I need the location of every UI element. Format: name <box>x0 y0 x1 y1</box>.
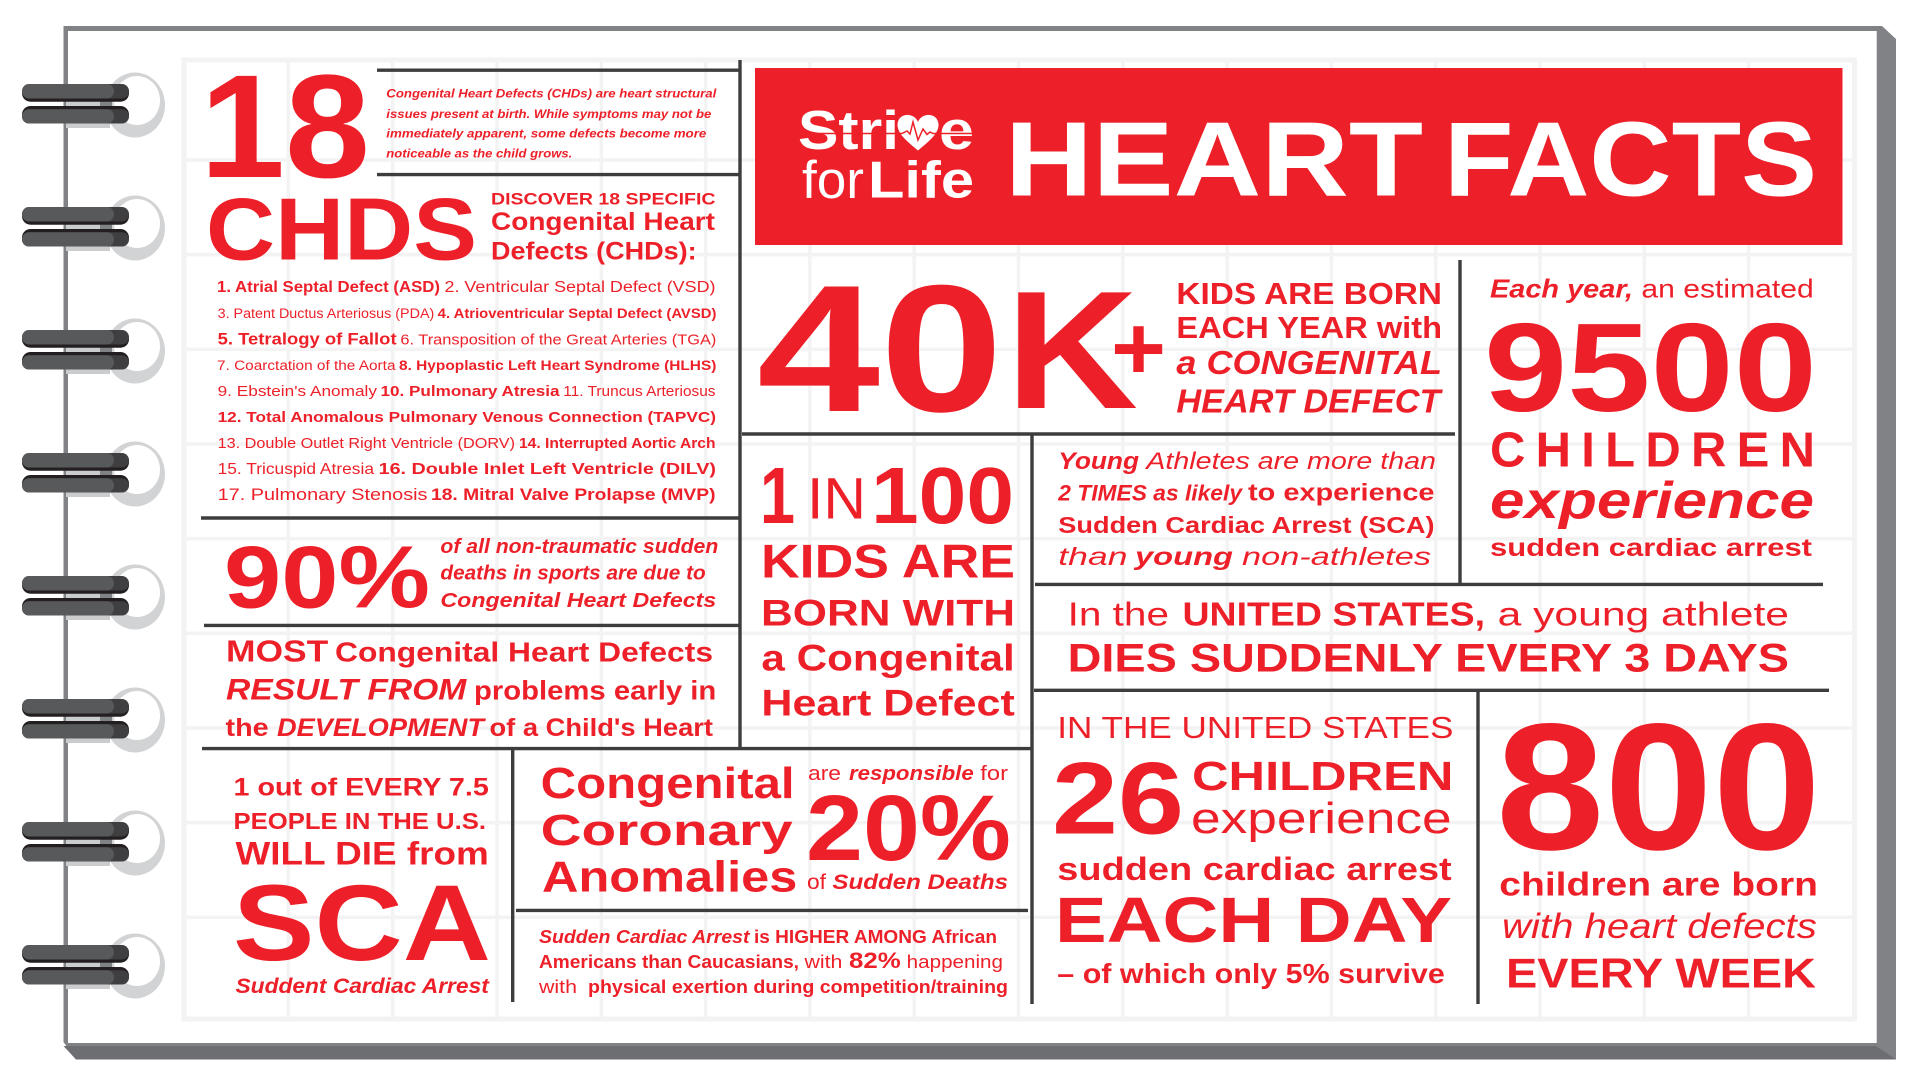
stat: 40K+ kids born each year <box>757 248 1443 450</box>
stat: 1 in 100 kids: IN <box>807 467 866 532</box>
most congenital heart defects fact: the <box>226 714 269 742</box>
stat: 1 in 100 kids: Heart Defect <box>761 683 1015 724</box>
young athletes fact <box>1057 448 1436 571</box>
intro paragraph: immediately apparent, some defects become more <box>386 127 707 141</box>
stat: coronary anomalies 20%: are <box>808 763 841 785</box>
intro paragraph: noticeable as the child grows. <box>386 147 572 161</box>
number 40K+: + <box>1111 299 1166 399</box>
number 800: 800 <box>1496 687 1821 888</box>
list of 18 congenital heart defects: 3. Patent Ductus Arteriosus (PDA) <box>218 306 434 321</box>
SCA among African Americans fact: is HIGHER AMONG African <box>754 926 997 947</box>
stat: coronary anomalies 20% <box>541 759 1011 901</box>
caption: KIDS ARE BORN <box>1176 276 1442 311</box>
caption: HEART DEFECT <box>1176 382 1443 420</box>
logo: Strive for Life: e <box>939 99 974 161</box>
number 18: 18 <box>200 45 370 209</box>
stat: coronary anomalies 20%: Sudden Deaths <box>832 871 1008 894</box>
SCA among African Americans fact: physical exertion during competition/training <box>588 976 1008 997</box>
word CHDS: CHDS <box>206 180 477 279</box>
most congenital heart defects fact: Congenital Heart Defects <box>335 636 713 667</box>
title: HEART FACTS: HEART <box>1005 100 1423 218</box>
stat: 800 children every week <box>1496 687 1821 996</box>
heading: discover 18 specific CHDs: DISCOVER 18 SPECIFIC <box>491 190 716 208</box>
title: HEART FACTS <box>1005 100 1817 218</box>
most congenital heart defects fact <box>226 633 716 742</box>
stat: SCA 1 out of 7.5 people <box>233 774 491 998</box>
stat: 800 children every week: with heart defects <box>1502 907 1817 946</box>
stat: 1 in 100 kids: KIDS ARE <box>761 534 1015 588</box>
logo: Strive for Life: Life <box>868 151 974 209</box>
most congenital heart defects fact: problems early in <box>474 676 716 706</box>
stat: SCA 1 out of 7.5 people: Suddent Cardiac Arrest <box>236 975 490 998</box>
stat: 26 children each day: CHILDREN <box>1192 753 1453 799</box>
stat: 90% of sudden deaths in sports: Congenital Heart Defects <box>440 590 716 612</box>
fact: athlete dies every 3 days <box>1068 595 1789 680</box>
divider rules <box>201 60 1829 1004</box>
SCA among African Americans fact: Americans than Caucasians, <box>539 951 799 972</box>
stat: 26 children each day: – of which only 5% survive <box>1057 958 1445 989</box>
list of 18 congenital heart defects: 8. Hypoplastic Left Heart Syndrome (HLHS) <box>399 358 716 373</box>
SCA among African Americans fact: 82% <box>849 948 901 973</box>
number 9500: 9500 <box>1484 297 1817 438</box>
number 26: 26 <box>1052 740 1184 855</box>
list of 18 congenital heart defects: 5. Tetralogy of Fallot <box>218 329 397 348</box>
SCA among African Americans fact: happening <box>907 951 1003 972</box>
young athletes fact: 2 TIMES as likely <box>1057 481 1244 506</box>
heading: discover 18 specific CHDs <box>491 190 716 265</box>
SCA among African Americans fact: Sudden Cardiac Arrest <box>539 926 750 947</box>
stat: 26 children each day <box>1052 710 1453 989</box>
stat: 90% of sudden deaths in sports: 90% <box>224 527 430 626</box>
most congenital heart defects fact: RESULT FROM <box>226 674 467 707</box>
list of 18 congenital heart defects: 12. Total Anomalous Pulmonary Venous Connection (TAPVC) <box>218 409 716 426</box>
list of 18 congenital heart defects: 16. Double Inlet Left Ventricle (DILV) <box>379 461 716 478</box>
young athletes fact: young <box>1132 543 1233 571</box>
logo: Strive for Life: Stri <box>798 99 899 161</box>
stat: SCA 1 out of 7.5 people: WILL DIE from <box>236 836 489 872</box>
stat: 9500 children: CHILDREN <box>1490 424 1815 478</box>
list of 18 congenital heart defects: 9. Ebstein's Anomaly <box>218 384 378 400</box>
stat: 800 children every week: children are born <box>1499 865 1818 902</box>
stat: 9500 children: sudden cardiac arrest <box>1490 534 1813 562</box>
logo: Strive for Life <box>798 99 974 210</box>
young athletes fact: Sudden Cardiac Arrest (SCA) <box>1058 512 1434 538</box>
list of 18 congenital heart defects: 10. Pulmonary Atresia <box>380 384 561 400</box>
most congenital heart defects fact: of a Child's Heart <box>490 714 714 742</box>
SCA among African Americans fact <box>538 926 1008 997</box>
stat: coronary anomalies 20%: Coronary <box>541 806 793 855</box>
stat: 9500 children: Each year, <box>1490 274 1633 304</box>
number 40K+ <box>757 248 1166 450</box>
young athletes fact: Athletes are more than <box>1144 448 1436 475</box>
most congenital heart defects fact: DEVELOPMENT <box>277 714 487 742</box>
stat: 9500 children: experience <box>1490 472 1814 530</box>
list of 18 congenital heart defects: 17. Pulmonary Stenosis <box>218 486 428 504</box>
heading: discover 18 specific CHDs: Congenital Heart <box>491 208 716 236</box>
young athletes fact: than <box>1058 543 1128 571</box>
list of 18 congenital heart defects: 4. Atrioventricular Septal Defect (AVSD) <box>438 306 716 321</box>
list of 18 congenital heart defects: 14. Interrupted Aortic Arch <box>519 436 716 452</box>
young athletes fact: non-athletes <box>1242 543 1431 571</box>
stat: 26 children each day: sudden cardiac arrest <box>1057 851 1452 887</box>
stat: SCA 1 out of 7.5 people: 1 out of EVERY 7.5 <box>234 774 489 802</box>
list of 18 congenital heart defects: 11. Truncus Arteriosus <box>563 384 716 400</box>
title: HEART FACTS: FACTS <box>1444 100 1817 218</box>
list of 18 congenital heart defects: 15. Tricuspid Atresia <box>218 461 374 478</box>
list of 18 congenital heart defects: 1. Atrial Septal Defect (ASD) <box>217 279 440 296</box>
stat: 18 CHDs <box>200 45 477 279</box>
stat: 1 in 100 kids: 1 <box>760 451 795 540</box>
young athletes fact: Young <box>1058 448 1139 475</box>
young athletes fact: to experience <box>1248 480 1434 507</box>
header banner <box>755 68 1842 245</box>
stat: 9500 children <box>1484 274 1817 562</box>
most congenital heart defects fact: MOST <box>226 633 328 668</box>
fact: athlete dies every 3 days: In the <box>1068 595 1169 632</box>
list of 18 congenital heart defects: 2. Ventricular Septal Defect (VSD) <box>444 279 716 296</box>
list of 18 congenital heart defects: 18. Mitral Valve Prolapse (MVP) <box>431 486 716 504</box>
number 40K+: K <box>1006 256 1138 444</box>
number 40K+: 40 <box>757 248 1003 450</box>
stat: 90% of sudden deaths in sports: of all non-traumatic sudden <box>440 536 718 558</box>
list of 18 congenital heart defects <box>217 279 716 504</box>
fact: athlete dies every 3 days: a young athlete <box>1498 595 1789 632</box>
caption <box>1176 276 1443 420</box>
intro paragraph: Congenital Heart Defects (CHDs) are heart structural <box>386 86 717 100</box>
intro paragraph: issues present at birth. While symptoms may not be <box>386 107 712 121</box>
stat: 1 in 100 kids: 100 <box>871 451 1014 540</box>
stat: 1 in 100 kids: a Congenital <box>761 638 1015 679</box>
logo: Strive for Life: for <box>802 151 864 210</box>
heading: discover 18 specific CHDs: Defects (CHDs): <box>491 237 697 265</box>
stat: 90% of sudden deaths in sports: deaths in sports are due to <box>440 563 706 585</box>
stat: coronary anomalies 20%: Anomalies <box>542 852 797 901</box>
SCA among African Americans fact: with <box>803 951 842 972</box>
stat: 1 in 100 kids <box>760 451 1015 724</box>
stat: 26 children each day: experience <box>1191 794 1452 843</box>
word SCA: SCA <box>233 862 491 983</box>
number 20%: 20% <box>806 776 1011 880</box>
spiral binding rings <box>22 72 165 998</box>
fact: athlete dies every 3 days: DIES SUDDENLY EVERY 3 DAYS <box>1068 636 1789 680</box>
grid paper background <box>184 60 1855 1019</box>
list of 18 congenital heart defects: 7. Coarctation of the Aorta <box>217 358 396 373</box>
SCA among African Americans fact: with <box>538 976 577 997</box>
stat: 26 children each day: IN THE UNITED STATES <box>1057 710 1453 745</box>
stat: 800 children every week: EVERY WEEK <box>1506 949 1816 996</box>
stat: coronary anomalies 20%: of <box>807 871 826 894</box>
fact: athlete dies every 3 days: UNITED STATES, <box>1182 595 1485 632</box>
stat: 1 in 100 kids: BORN WITH <box>761 592 1015 633</box>
stat: SCA 1 out of 7.5 people: PEOPLE IN THE U.S. <box>234 808 486 834</box>
list of 18 congenital heart defects: 13. Double Outlet Right Ventricle (DORV) <box>218 436 515 452</box>
intro paragraph <box>386 86 717 161</box>
caption: EACH YEAR with <box>1176 310 1442 345</box>
stat: 26 children each day: EACH DAY <box>1055 884 1452 956</box>
stat: 90% of sudden deaths in sports <box>224 527 718 626</box>
caption: a CONGENITAL <box>1176 344 1442 381</box>
stat: coronary anomalies 20%: responsible <box>849 763 974 785</box>
stat: coronary anomalies 20%: Congenital <box>541 759 795 808</box>
stat: coronary anomalies 20%: for <box>980 763 1008 785</box>
list of 18 congenital heart defects: 6. Transposition of the Great Arteries (TGA) <box>400 332 716 348</box>
stat: 9500 children: an estimated <box>1641 274 1814 304</box>
